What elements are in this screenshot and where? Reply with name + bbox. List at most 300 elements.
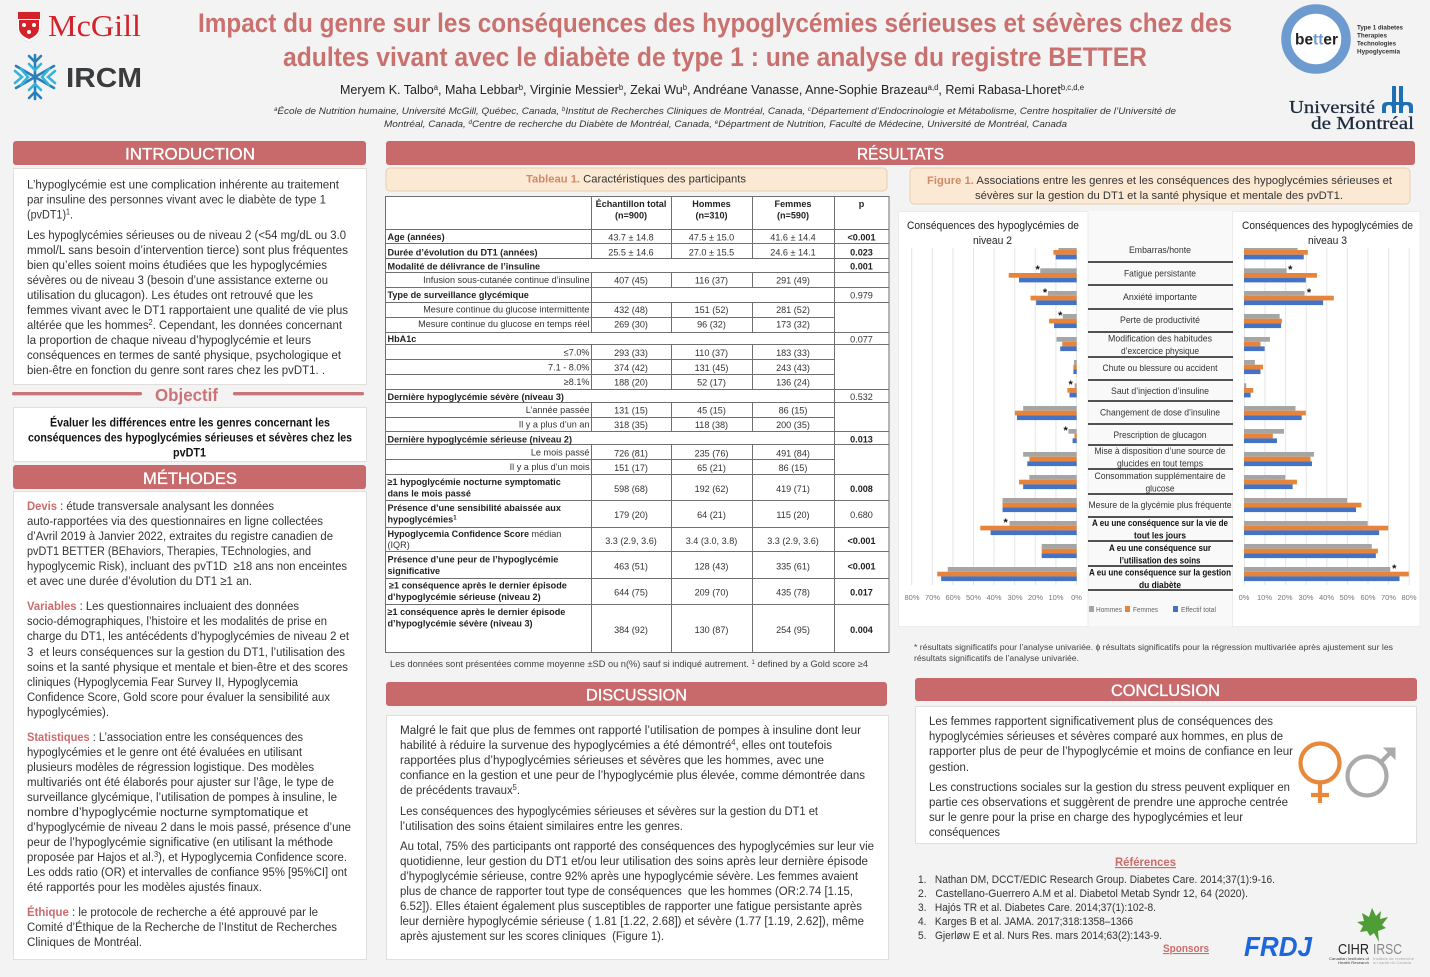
panel: conclusion: rapporter plus de peur de l’hypoglycémie et moins de confiance en leur xyxy=(929,744,1293,758)
logo: McGill: McGill xyxy=(48,8,141,43)
table rows: 0.023 xyxy=(850,248,873,258)
panel: introduction: conséquences en termes de santé physique, psychologique et xyxy=(27,348,342,362)
significance markers niveau 2: * xyxy=(1058,310,1063,322)
caption: tableau 1 xyxy=(386,168,887,191)
panel: discussion: habilité à réduire la survenue des hypoglycémies a été démontré xyxy=(400,738,749,752)
panel: discussion: , elles ont toutefois xyxy=(736,738,832,752)
logo: IRCM xyxy=(15,55,142,99)
table rows: <0.001 xyxy=(847,536,876,546)
panel: objectif xyxy=(14,408,366,462)
table rows: Durée d’évolution du DT1 (années) xyxy=(388,248,538,258)
bars: Effectif total niveau 3 xyxy=(1244,255,1400,581)
table rows: 131 (15) xyxy=(614,406,648,416)
heading: méthodes: MÉTHODES xyxy=(143,469,237,488)
table rows: 188 (20) xyxy=(614,378,648,388)
heading: conclusion xyxy=(915,678,1417,701)
table rows: 0.001 xyxy=(850,262,873,272)
panel: discussion: Malgré le fait que plus de femmes ont rapporté l’utilisation de pompes à insuline dont leur xyxy=(400,723,861,737)
axis niveau 2: 50% xyxy=(966,593,981,602)
table rows: 432 (48) xyxy=(614,305,648,315)
panel: introduction xyxy=(14,168,366,384)
axis niveau 2: 70% xyxy=(925,593,940,602)
authors: b xyxy=(683,83,688,92)
panel: méthodes: hypoglycémies). xyxy=(27,705,109,719)
list: références: 1. Nathan DM, DCCT/EDIC Research Group. Diabetes Care. 2014;37(1):9-16. xyxy=(918,874,1275,886)
chart category labels: glucides en tout temps xyxy=(1117,458,1203,468)
logo: Université de Montréal xyxy=(1289,86,1414,133)
table header row: Hommes xyxy=(692,199,731,209)
chart category labels: Anxiété importante xyxy=(1123,292,1197,302)
title: Impact du genre sur les conséquences des hypoglycémies sérieuses et sévères chez des xyxy=(198,8,1232,38)
axis niveau 2: 40% xyxy=(986,593,1002,602)
list: références: 4. Karges B et al. JAMA. 2017;318:1358–1366 xyxy=(918,916,1133,928)
table rows: Dernière hypoglycémie sévère (niveau 3) xyxy=(388,392,564,402)
table header row: p xyxy=(859,199,865,209)
table note: defined by a Gold score ≥4 xyxy=(755,659,868,669)
chart: conséquences niveau 2: niveau 2 xyxy=(973,235,1012,247)
table rows: ≥1 conséquence après le dernier épisode xyxy=(388,607,565,617)
table rows: 96 (32) xyxy=(697,320,726,330)
axis niveau 2: 10% xyxy=(1048,593,1064,602)
panel: introduction: . Cependant, les données concernant xyxy=(153,318,343,332)
axis niveau 2 xyxy=(904,593,1082,602)
logo: CIHR IRSC: Canadian Institutes of xyxy=(1329,957,1369,961)
panel: méthodes: d’Avril 2019 à Janvier 2022, extraites du registre canadien de xyxy=(27,529,333,543)
chart legend xyxy=(1089,606,1216,614)
table rows: 183 (33) xyxy=(776,348,810,358)
axis niveau 3: 60% xyxy=(1360,593,1376,602)
panel: conclusion: Les constructions sociales sur la gestion du stress peuvent expliquer en xyxy=(929,780,1290,794)
table rows: 374 (42) xyxy=(614,363,648,373)
logo: CIHR IRSC: Instituts de recherche xyxy=(1373,957,1414,961)
panel: discussion: l’utilisation des soins étaient similaires entre les genres. xyxy=(400,819,683,833)
table header row: Femmes xyxy=(775,199,811,209)
table rows: 235 (76) xyxy=(695,448,728,458)
heading: méthodes xyxy=(13,465,366,489)
axis niveau 3 xyxy=(1239,593,1417,602)
chart: conséquences niveau 2 xyxy=(898,212,1088,626)
table rows: (IQR) xyxy=(388,540,410,550)
table rows: 86 (15) xyxy=(779,406,807,416)
axis niveau 3: 0% xyxy=(1239,593,1250,602)
bars: Hommes niveau 3 xyxy=(1244,248,1390,572)
panel: méthodes: Comité d’Éthique de la Recherche de l’Institut de Recherches xyxy=(27,919,337,934)
table rows: 3.4 (3.0, 3.8) xyxy=(686,536,737,546)
heading: objectif: Objectif xyxy=(155,385,218,405)
axis niveau 3: 80% xyxy=(1401,593,1417,602)
panel: objectif: conséquences des hypoglycémies sérieuses et sévères chez les xyxy=(28,430,352,444)
table rows: 419 (71) xyxy=(776,484,810,494)
table rows: d’hypoglycémie sérieuse (niveau 2) xyxy=(388,592,541,602)
panel: méthodes: et avec une durée d’évolution du DT1 ≥1 an. xyxy=(27,574,252,588)
table rows: 116 (37) xyxy=(695,276,728,286)
authors: , Remi Rabasa-Lhoret xyxy=(938,82,1061,97)
table rows: 0.979 xyxy=(850,290,873,300)
panel: conclusion: hypoglycémies sérieuses et sévères comparé aux hommes, en plus de xyxy=(929,729,1283,743)
table rows: Type de surveillance glycémique xyxy=(388,290,529,300)
table rows: 130 (87) xyxy=(695,625,728,635)
panel: méthodes: d’hypoglycémie de niveau 2 dans le mois passé, présence d’une xyxy=(27,820,351,834)
logo: FRDJ: FRDJ xyxy=(1244,931,1313,962)
panel: méthodes: hypoglycémies et le genre ont été évaluées en utilisant xyxy=(27,745,303,759)
affiliations: b xyxy=(562,107,566,113)
heading: discussion xyxy=(386,682,887,706)
logo: Université de Montréal: de Montréal xyxy=(1311,113,1414,133)
table: caractéristiques des participants xyxy=(386,196,889,652)
affiliations: Institut de Recherches Cliniques de Montréal, Canada, xyxy=(565,106,808,117)
panel: discussion: 4 xyxy=(731,738,736,747)
panel: méthodes: nombre d’hypoglycémie nocturne symptomatique et xyxy=(27,805,309,819)
table rows: 25.5 ± 14.6 xyxy=(608,248,654,258)
chart category labels: Changement de dose d’insuline xyxy=(1100,408,1220,418)
chart category labels: l’utilisation des soins xyxy=(1120,556,1200,566)
chart category labels: d’excercice physique xyxy=(1121,346,1199,356)
panel: introduction: 2 xyxy=(149,318,153,327)
table rows: 45 (15) xyxy=(697,406,726,416)
panel: méthodes: multivariés ont été élaborés pour ajuster sur l’âge, le type de xyxy=(27,775,334,789)
logo: BETTER: better xyxy=(1295,32,1338,48)
table rows: significative xyxy=(388,566,440,576)
bars: Effectif total niveau 2 xyxy=(941,255,1077,581)
panel: introduction: sévères ou de niveau 3 (besoin d’une assistance externe ou xyxy=(27,273,328,287)
table rows: 435 (78) xyxy=(776,588,810,598)
chart category labels: Embarras/honte xyxy=(1129,245,1191,255)
significance markers niveau 3 xyxy=(1288,264,1397,575)
affiliations xyxy=(274,106,1176,130)
table rows: Modalité de délivrance de l’insuline xyxy=(388,262,540,272)
table rows: 291 (49) xyxy=(776,276,810,286)
chart: conséquences niveau 3: Conséquences des hypoglycémies de xyxy=(1242,220,1413,232)
panel: méthodes: hypoglycemic Risk), incluant des pvT1D ≥18 ans non enceintes xyxy=(27,559,347,573)
panel: introduction: 1 xyxy=(66,208,70,216)
panel: discussion: de précédents travaux xyxy=(400,783,521,797)
table rows: 384 (92) xyxy=(614,625,648,635)
table rows: 52 (17) xyxy=(697,378,726,388)
table rows: 64 (21) xyxy=(697,510,726,520)
affiliations: c xyxy=(808,107,811,113)
panel: introduction: mmol/L sans besoin d’intervention tierce) sont plus fréquentes xyxy=(27,243,348,257)
heading: résultats xyxy=(386,141,1415,165)
axis niveau 2: 0% xyxy=(1071,593,1082,602)
panel: conclusion: conséquences xyxy=(929,825,1000,839)
table rows: HbA1c xyxy=(388,334,416,344)
logo: CIHR IRSC: en santé du Canada xyxy=(1373,961,1411,965)
table header row: (n=590) xyxy=(777,210,809,220)
list: références xyxy=(918,874,1275,942)
bars: Femmes niveau 2 xyxy=(937,250,1077,576)
logo: Université de Montréal: Université xyxy=(1289,97,1375,117)
table rows: 0.013 xyxy=(850,434,873,444)
panel: méthodes: Cliniques de Montréal. xyxy=(27,935,142,949)
bars: Femmes niveau 3 xyxy=(1244,250,1409,576)
panel: discussion: Les conséquences des hypoglycémies sérieuses et sévères sur la gestion du DT1 et xyxy=(400,804,819,818)
panel: méthodes: Les odds ratio (OR) et intervalles de confiance 95% [95%CI] ont xyxy=(27,865,348,879)
chart category labels: A eu une conséquence sur la vie de xyxy=(1092,518,1228,528)
table rows: 151 (52) xyxy=(695,305,728,315)
panel: introduction: altérée que les hommes xyxy=(27,318,157,332)
affiliations: Montréal, Canada, xyxy=(384,119,463,130)
panel: objectif: pvDT1 xyxy=(173,446,206,460)
authors: a,d xyxy=(928,83,938,92)
axis niveau 3: 20% xyxy=(1277,593,1293,602)
table rows: 200 (35) xyxy=(776,420,810,430)
list: références: 3. Hajós TR et al. Diabetes Care. 2014;37(1):102-8. xyxy=(918,902,1156,914)
panel: méthodes: surveillance glycémique, l’utilisation de pompes à insuline, le xyxy=(27,790,337,804)
table rows: 1 xyxy=(453,516,457,522)
panel: introduction: bien qu’elles soient moins étudiées que les hypoglycémies xyxy=(27,258,327,272)
chart category labels: Mise à disposition d’une source de xyxy=(1094,446,1226,456)
table rows: 179 (20) xyxy=(614,510,648,520)
logo: CIHR IRSC: Health Research xyxy=(1338,961,1369,965)
table rows: 726 (81) xyxy=(614,448,648,458)
panel: conclusion xyxy=(916,706,1416,844)
affiliations: Départment de Nutrition, Faculté de Médecine, Université de Montréal, Canada xyxy=(718,119,1067,130)
panel: méthodes: soins et la santé physique et mentale et bien-être et des scores xyxy=(27,660,348,674)
figure note: résultats significatifs de l’analyse univariée. xyxy=(914,653,1079,663)
table rows: d’hypoglycémie sévère (niveau 3) xyxy=(388,618,533,628)
table rows: 254 (95) xyxy=(776,625,810,635)
heading: introduction xyxy=(13,141,366,165)
table rows: 136 (24) xyxy=(776,378,810,388)
chart category labels: Modification des habitudes xyxy=(1108,334,1212,344)
panel: discussion: après ajustement sur les scores cliniques (Figure 1). xyxy=(400,929,664,943)
table rows: 173 (32) xyxy=(776,320,810,330)
significance markers niveau 3: * xyxy=(1307,287,1312,299)
chart category labels: A eu une conséquence sur la gestion xyxy=(1089,568,1231,578)
icon: female symbol xyxy=(1300,744,1340,803)
table rows: 110 (37) xyxy=(695,348,728,358)
heading: résultats: RÉSULTATS xyxy=(857,144,944,164)
table rows: 3.3 (2.9, 3.6) xyxy=(767,536,819,546)
logo: BETTER: Hypoglycemia xyxy=(1357,48,1400,56)
chart category labels: Prescription de glucagon xyxy=(1114,430,1206,440)
list: références: 5. Gjerløw E et al. Nurs Res. mars 2014;63(2):143-9. xyxy=(918,930,1162,942)
table rows: 128 (43) xyxy=(695,562,728,572)
axis niveau 2: 80% xyxy=(904,593,920,602)
table rows: Infusion sous-cutanée continue d’insuline xyxy=(423,275,590,285)
significance markers niveau 3: * xyxy=(1288,264,1293,276)
authors: b xyxy=(619,83,624,92)
chart category labels: Mesure de la glycémie plus fréquente xyxy=(1088,500,1232,510)
panel: introduction: (pvDT1) xyxy=(27,208,71,222)
table header row: (n=900) xyxy=(615,210,647,220)
chart: conséquences niveau 3 xyxy=(1232,212,1420,626)
chart category labels: du diabète xyxy=(1139,580,1181,590)
affiliations: École de Nutrition humaine, Université McGill, Québec, Canada, xyxy=(277,106,562,117)
table rows: 0.077 xyxy=(850,334,873,344)
significance markers niveau 2 xyxy=(1004,264,1074,529)
panel: méthodes: proposée par Hajos et al. xyxy=(27,850,163,864)
panel: méthodes: ), et Hypoglycemia Confidence score. xyxy=(158,850,347,864)
caption: figure 1: sévères sur la gestion du DT1 et la santé physique et mentale des pvDT1. xyxy=(975,190,1343,202)
table rows: Mesure continue du glucose intermittente xyxy=(423,304,590,314)
panel: méthodes: plusieurs modèles de régression logistique. Des modèles xyxy=(27,760,314,774)
authors: , Maha Lebbar xyxy=(438,82,519,97)
affiliations: d xyxy=(469,120,473,126)
chart category labels: Saut d’injection d’insuline xyxy=(1111,386,1209,396)
table rows: Présence d’une peur de l’hypoglycémie xyxy=(388,554,558,564)
panel: discussion: . xyxy=(517,783,520,797)
heading: références: Références xyxy=(1115,855,1176,869)
panel: discussion: d’hypoglycémie sérieuse, contre 92% après une hypoglycémie sévère. Les femmes avaient xyxy=(400,869,859,883)
affiliations: Département d’Endocrinologie et Métabolisme, Centre hospitalier de l’Université de xyxy=(811,106,1176,117)
table rows: 192 (62) xyxy=(695,484,728,494)
heading: sponsors: Sponsors xyxy=(1163,943,1209,955)
table rows: ≥1 hypoglycémie nocturne symptomatic xyxy=(388,477,561,487)
panel: discussion: quotidienne, leur gestion du DT1 et/ou leur utilisation des soins après leur dernière épisode xyxy=(400,854,868,868)
chart legend: Hommes xyxy=(1096,607,1122,614)
table rows: 7.1 - 8.0% xyxy=(548,362,590,372)
chart category labels: Perte de productivité xyxy=(1120,315,1200,325)
axis niveau 3: 70% xyxy=(1381,593,1396,602)
logo: BETTER: Therapies xyxy=(1357,32,1387,40)
table rows: 0.017 xyxy=(850,588,873,598)
panel: discussion: leur dernière hypoglycémie sérieuse ( 1.81 [1.22, 2.68]) et sévère (1.77 [1.19, 2.62]), même xyxy=(400,914,864,928)
panel: méthodes: pvDT1 BETTER (BEhaviors, Therapies, TEchnologies, and xyxy=(27,544,311,558)
axis niveau 2: 20% xyxy=(1028,593,1043,602)
table note: Les données sont présentées comme moyenne ±SD ou n(%) sauf si indiqué autrement. xyxy=(390,659,731,669)
heading: conclusion: CONCLUSION xyxy=(1111,681,1220,700)
significance markers niveau 2: * xyxy=(1004,517,1009,529)
table rows: ≤7.0% xyxy=(564,348,590,358)
table rows: 293 (33) xyxy=(614,348,648,358)
figure: background of labels column xyxy=(1088,211,1232,626)
axis niveau 2: 60% xyxy=(945,593,961,602)
panel: introduction: L’hypoglycémie est une complication inhérente au traitement xyxy=(27,178,340,192)
table rows: <0.001 xyxy=(847,562,876,572)
bars: Hommes niveau 2 xyxy=(948,248,1077,572)
table header row xyxy=(596,199,865,220)
chart category labels: Consommation supplémentaire de xyxy=(1094,471,1226,481)
table rows: ≥8.1% xyxy=(564,377,590,387)
significance markers niveau 2: * xyxy=(1064,425,1069,437)
list: références: 2. Castellano-Guerrero A.M et al. Diabetol Metab Syndr 12, 64 (2020). xyxy=(918,888,1248,900)
table rows: Présence d’une sensibilité abaissée aux xyxy=(388,503,561,513)
table rows: 131 (45) xyxy=(695,363,728,373)
table rows: Il y a plus d’un mois xyxy=(510,462,590,472)
chart category labels: Fatigue persistante xyxy=(1124,268,1196,278)
table rows: 243 (43) xyxy=(776,363,810,373)
chart category labels xyxy=(1088,245,1233,590)
table rows: Hypoglycemia Confidence Score médian xyxy=(388,529,561,539)
panel: méthodes xyxy=(14,492,366,960)
authors: b xyxy=(519,83,524,92)
logo: CIHR IRSC: CIHR xyxy=(1338,942,1369,958)
table rows: 47.5 ± 15.0 xyxy=(689,232,734,242)
authors: a xyxy=(434,83,439,92)
table rows: 27.0 ± 15.5 xyxy=(689,248,734,258)
table rows: 24.6 ± 14.1 xyxy=(770,248,816,258)
table rows: 0.680 xyxy=(850,510,873,520)
heading: objectif xyxy=(12,385,364,405)
significance markers niveau 2: * xyxy=(1043,287,1048,299)
table rows: 269 (30) xyxy=(614,320,648,330)
panel: méthodes: 3 et leurs conséquences sur la gestion du DT1, l’utilisation des xyxy=(27,645,345,659)
panel: méthodes: socio-démographiques, l’histoire et les modalités de prise en xyxy=(27,614,327,628)
significance markers niveau 2: * xyxy=(1069,379,1074,391)
chart legend: Femmes xyxy=(1133,607,1158,614)
table rows: 644 (75) xyxy=(614,588,648,598)
table rows: dans le mois passé xyxy=(388,488,471,498)
figure note xyxy=(914,642,1393,663)
table rows: 0.008 xyxy=(850,484,873,494)
panel: introduction: par insuline des personnes vivant avec le diabète de type 1 xyxy=(27,192,326,206)
panel: discussion: rapportées plus d’hypoglycémies sérieuses et sévères que les hommes, avec une xyxy=(400,753,824,767)
chart: conséquences niveau 3: niveau 3 xyxy=(1308,235,1347,247)
panel: méthodes: Devis : étude transversale analysant les données xyxy=(27,499,274,513)
table rows: 281 (52) xyxy=(776,305,810,315)
table rows: Il y a plus d’un an xyxy=(519,420,590,430)
chart category labels: tout les jours xyxy=(1134,530,1186,540)
panel: conclusion: Les femmes rapportent significativement plus de conséquences des xyxy=(929,714,1273,728)
panel: discussion: plus de chance de rapporter tout type de conséquences que les hommes (OR:2.74 [1.15, xyxy=(400,884,853,898)
panel: discussion: confiance en la gestion et une peur de l’hypoglycémie plus élevée, comme démontrée dans xyxy=(400,768,865,782)
axis niveau 3: 40% xyxy=(1319,593,1334,602)
logo: CIHR IRSC: IRSC xyxy=(1373,942,1402,958)
panel: discussion: 6.52]). Elles étaient également plus susceptibles de rapporter une fatigue persistante après xyxy=(400,899,862,913)
panel: méthodes: 3 xyxy=(154,850,159,859)
logo: BETTER: Technologies xyxy=(1357,40,1396,48)
table rows: 41.6 ± 14.4 xyxy=(770,232,816,242)
table rows: 491 (84) xyxy=(776,448,810,458)
heading: discussion: DISCUSSION xyxy=(586,686,687,704)
table rows: 0.532 xyxy=(850,392,873,402)
caption: figure 1: Figure 1. Associations entre les genres et les conséquences des hypoglycémies sérieuses et xyxy=(927,175,1392,187)
table rows: 43.7 ± 14.8 xyxy=(608,232,654,242)
panel: introduction: Les hypoglycémies sérieuses ou de niveau 2 (<54 mg/dL ou 3.0 xyxy=(27,228,346,242)
title: adultes vivant avec le diabète de type 1 : une analyse du registre BETTER xyxy=(283,42,1147,72)
table rows: 3.3 (2.9, 3.6) xyxy=(605,536,657,546)
table rows: 65 (21) xyxy=(697,463,726,473)
authors: , Andréane Vanasse, Anne-Sophie Brazeau xyxy=(687,82,928,97)
table rows: 407 (45) xyxy=(614,276,648,286)
table rows: 209 (70) xyxy=(695,588,728,598)
table header row: (n=310) xyxy=(695,210,728,220)
table rows: 0.004 xyxy=(850,625,874,635)
affiliations: Centre de recherche du Diabète de Montréal, Canada, xyxy=(472,119,715,130)
table rows: 151 (17) xyxy=(614,463,648,473)
panel: introduction: femmes vivant avec le DT1 rapportaient une qualité de vie plus xyxy=(27,303,348,317)
logo: IRCM: IRCM xyxy=(66,62,142,93)
table rows: 463 (51) xyxy=(614,562,648,572)
significance markers niveau 3: * xyxy=(1392,563,1397,575)
table rows: L’année passée xyxy=(526,405,590,415)
table rows: 118 (38) xyxy=(695,420,728,430)
caption: figure 1 xyxy=(910,168,1410,204)
panel: méthodes: auto-rapportées via des questionnaires en ligne collectées xyxy=(27,514,323,528)
table rows: ≥1 conséquence après le dernier épisode xyxy=(389,580,567,590)
axis niveau 3: 30% xyxy=(1298,593,1314,602)
panel: méthodes: Éthique : le protocole de recherche a été approuvé par le xyxy=(27,904,318,919)
axis niveau 2: 30% xyxy=(1007,593,1023,602)
panel: méthodes: peur de l’hypoglycémie significative (en utilisant la méthode xyxy=(27,835,333,849)
panel: introduction: la proportion de chaque niveau d’hypoglycémie et leurs xyxy=(27,333,311,347)
affiliations: e xyxy=(715,120,719,126)
chart category labels: A eu une conséquence sur xyxy=(1109,543,1211,553)
panel: méthodes: charge du DT1, les antécédents d’hypoglycémies de niveau 2 et xyxy=(27,629,350,643)
panel: méthodes: Statistiques : L’association entre les conséquences des xyxy=(27,730,303,744)
table rows: <0.001 xyxy=(847,232,876,242)
logo: BETTER: Type 1 diabetes xyxy=(1357,24,1403,32)
panel: objectif: Évaluer les différences entre les genres concernant les xyxy=(50,414,330,430)
axis niveau 3: 10% xyxy=(1257,593,1272,602)
table rows: 318 (35) xyxy=(614,420,648,430)
chart category labels: glucose xyxy=(1146,484,1174,494)
table rows: hypoglycémies xyxy=(388,514,453,524)
logo: BETTER xyxy=(1286,9,1403,69)
panel: méthodes: Variables : Les questionnaires incluaient des données xyxy=(27,599,299,613)
panel: discussion: Au total, 75% des participants ont rapporté des conséquences des hypoglycémies sur leur vie xyxy=(400,839,874,853)
